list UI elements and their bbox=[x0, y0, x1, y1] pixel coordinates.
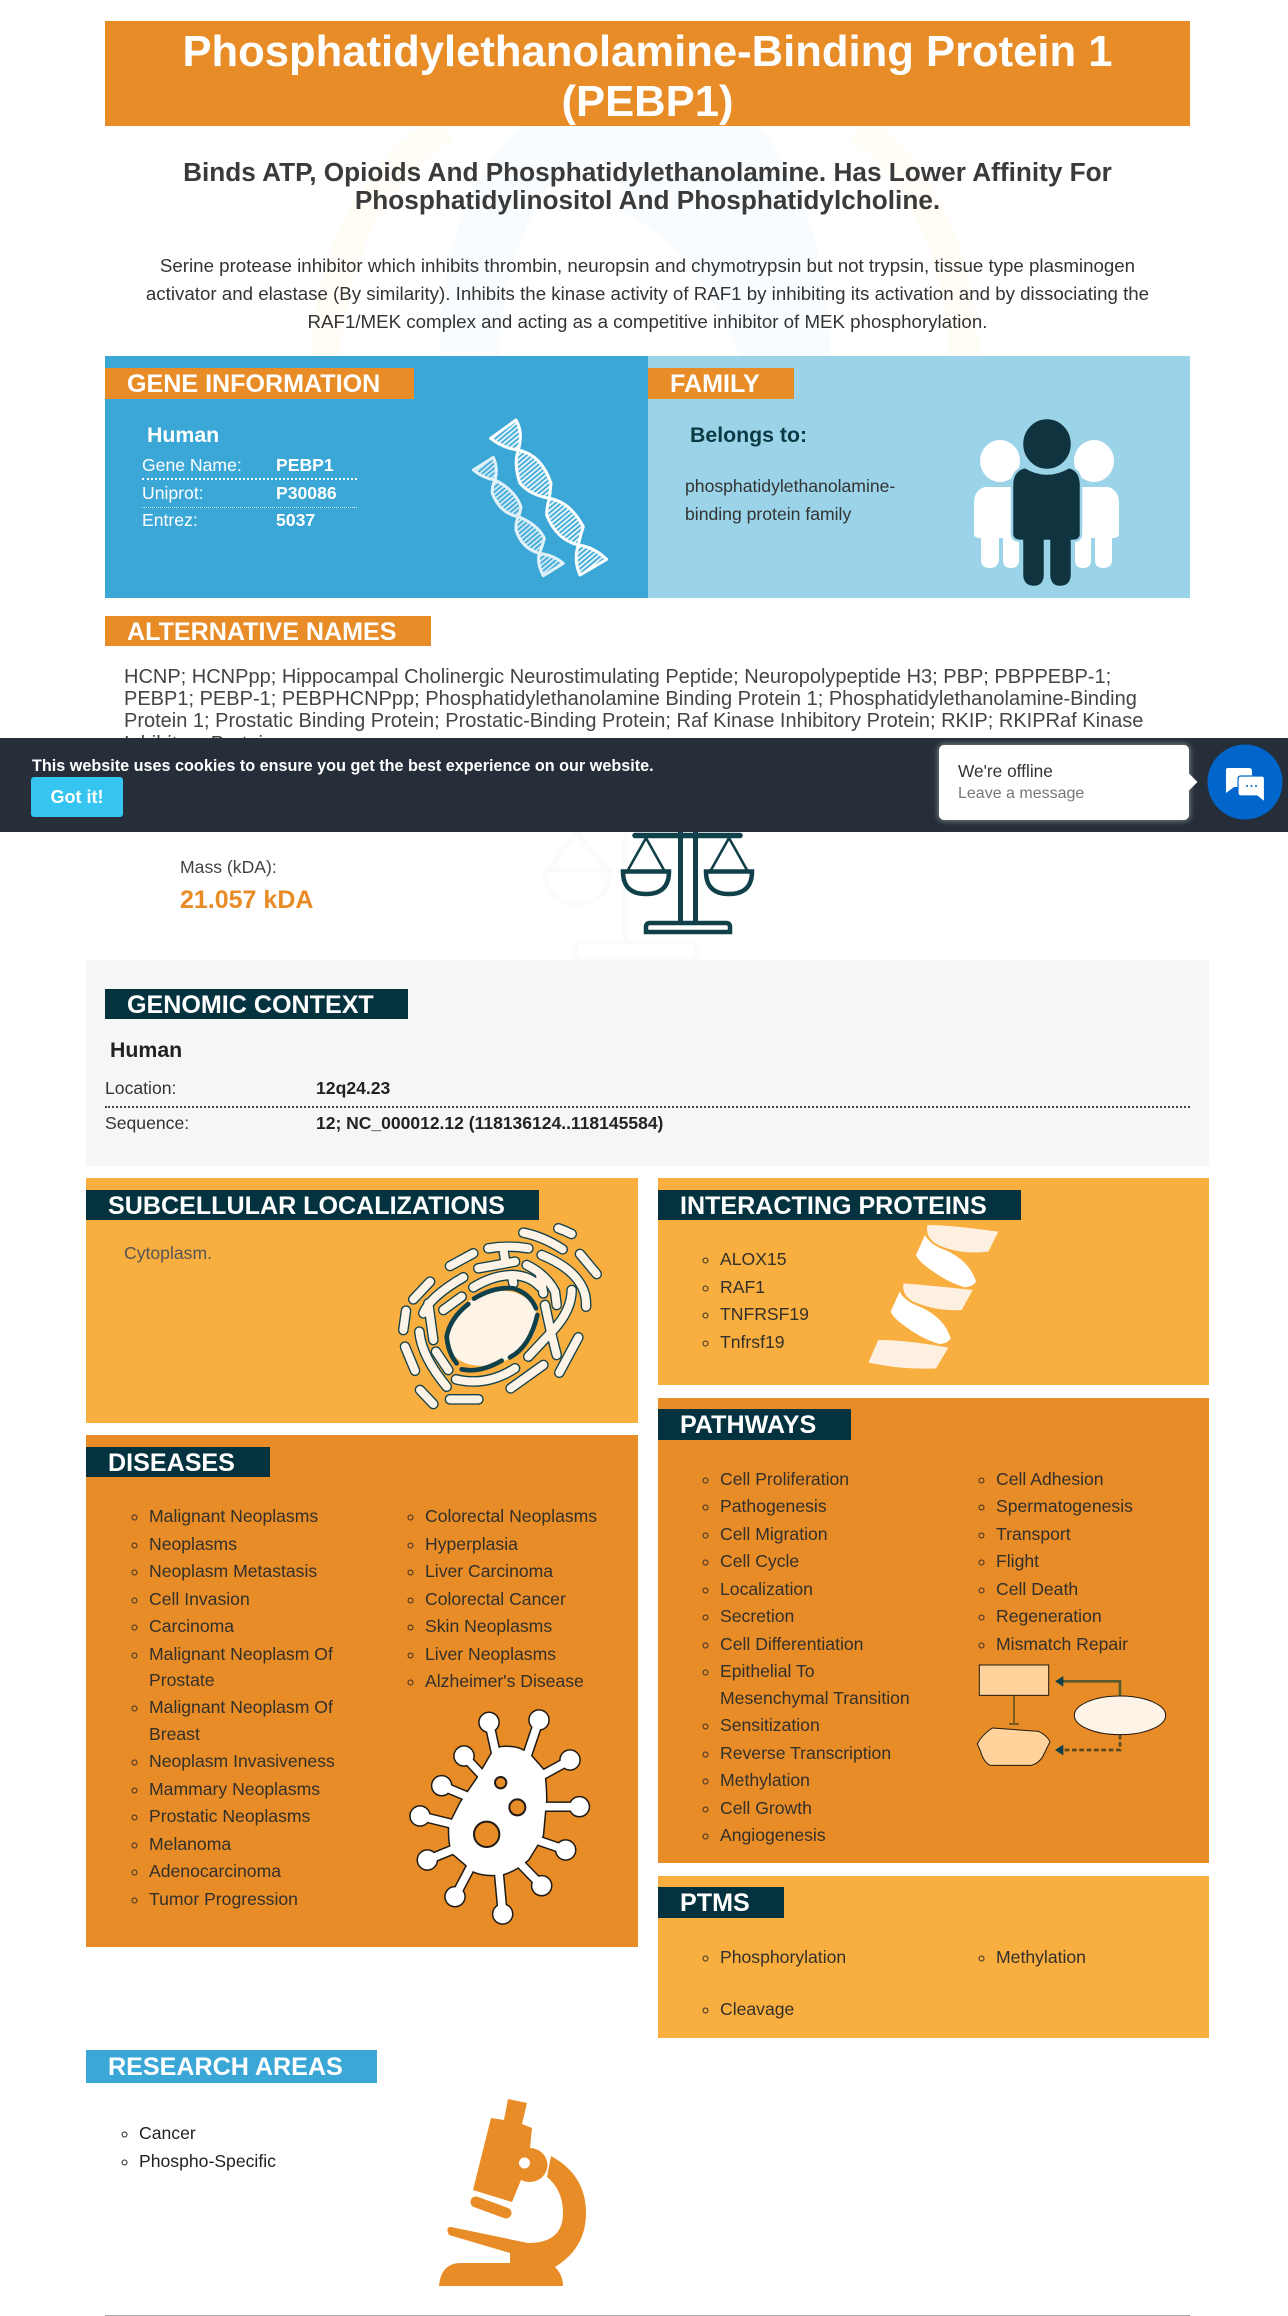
belongs to label: Belongs to: bbox=[690, 423, 807, 447]
pathway list column 2: Cell Death bbox=[996, 1579, 1078, 1599]
alternative names text: Inhibitory Protein bbox=[124, 733, 274, 755]
disease list column 2: Skin Neoplasms bbox=[425, 1616, 552, 1636]
panel: family bbox=[648, 356, 1190, 598]
research area list: Cancer bbox=[139, 2123, 196, 2143]
pathway list column 1: Cell Migration bbox=[720, 1524, 828, 1544]
icon: pathway schematic bbox=[976, 1664, 1166, 1766]
protein list: RAF1 bbox=[720, 1276, 765, 1296]
research area list bbox=[122, 2123, 276, 2170]
protein list: Tnfrsf19 bbox=[720, 1332, 785, 1352]
heading: diseases bbox=[86, 1447, 270, 1477]
panel: interacting proteins bbox=[658, 1178, 1209, 1385]
mass watermark bbox=[530, 832, 710, 964]
mass label: Mass (kDA): bbox=[180, 857, 277, 877]
disease list column 2: Colorectal Cancer bbox=[425, 1588, 566, 1608]
disease list column 1: Malignant Neoplasm Of Breast bbox=[149, 1697, 333, 1744]
heading: pathways bbox=[658, 1409, 851, 1440]
pathway list column 1: Secretion bbox=[720, 1606, 794, 1626]
disease list column 1: Mammary Neoplasms bbox=[149, 1779, 320, 1799]
description paragraph: RAF1/MEK complex and acting as a competitive inhibitor of MEK phosphorylation. bbox=[308, 310, 987, 332]
entrez row: Entrez: bbox=[142, 510, 198, 530]
heading: subcellular localizations: SUBCELLULAR LOCALIZATIONS bbox=[108, 1192, 505, 1220]
disease list column 2: Colorectal Neoplasms bbox=[425, 1506, 597, 1526]
panel: gene information bbox=[105, 356, 648, 598]
heading: pathways: PATHWAYS bbox=[680, 1411, 816, 1439]
uniprot row: Uniprot: bbox=[142, 483, 204, 503]
disease list column 1: Neoplasm Metastasis bbox=[149, 1561, 317, 1581]
pathway list column 1: Methylation bbox=[720, 1770, 810, 1790]
gene name row bbox=[142, 453, 357, 480]
disease list column 1: Adenocarcinoma bbox=[149, 1861, 281, 1881]
disease list column 1: Carcinoma bbox=[149, 1616, 234, 1636]
pathway list column 1: Sensitization bbox=[720, 1715, 820, 1735]
description paragraph bbox=[146, 254, 1149, 332]
title banner bbox=[105, 21, 1190, 126]
panel: subcellular localizations bbox=[86, 1178, 638, 1423]
pathway list column 1: Localization bbox=[720, 1579, 813, 1599]
disease list column 1: Malignant Neoplasm Of Prostate bbox=[149, 1644, 333, 1690]
heading: ptms bbox=[658, 1887, 784, 1918]
protein list: ALOX15 bbox=[720, 1249, 787, 1269]
description paragraph: Serine protease inhibitor which inhibits thrombin, neuropsin and chymotrypsin but not trypsin, tissue type plasminogen bbox=[160, 254, 1135, 276]
heading: gene information: GENE INFORMATION bbox=[127, 370, 380, 398]
pathway list column 2: Flight bbox=[996, 1551, 1039, 1571]
location row bbox=[105, 1076, 1190, 1108]
subtitle: Binds ATP, Opioids And Phosphatidylethanolamine. Has Lower Affinity For bbox=[183, 157, 1112, 187]
pathway list column 2: Spermatogenesis bbox=[996, 1496, 1133, 1516]
heading: family bbox=[648, 368, 794, 399]
sequence row: Sequence: bbox=[105, 1113, 189, 1133]
pathway list column 2: Transport bbox=[996, 1524, 1071, 1544]
chat prompt: Leave a message bbox=[958, 785, 1084, 802]
pathway list column 2 bbox=[978, 1469, 1133, 1654]
pathway list column 1: Reverse Transcription bbox=[720, 1742, 891, 1762]
protein list: TNFRSF19 bbox=[720, 1304, 809, 1324]
chat callout bbox=[939, 745, 1189, 820]
pathway list column 2: Mismatch Repair bbox=[996, 1634, 1128, 1654]
location row: 12q24.23 bbox=[316, 1078, 390, 1098]
disease list column 1: Neoplasms bbox=[149, 1534, 237, 1554]
panel: pathways bbox=[658, 1398, 1209, 1863]
subtitle bbox=[183, 157, 1112, 215]
panel: genomic context bbox=[86, 960, 1209, 1166]
alternative names text: HCNP; HCNPpp; Hippocampal Cholinergic Neurostimulating Peptide; Neuropolypeptide H3; PBP; PBPPEBP-1; bbox=[124, 666, 1111, 688]
sequence row: 12; NC_000012.12 (118136124..118145584) bbox=[316, 1113, 663, 1133]
gene name row: Gene Name: bbox=[142, 455, 242, 475]
chat status: We're offline bbox=[958, 761, 1053, 781]
cookie message: This website uses cookies to ensure you get the best experience on our website. bbox=[32, 757, 654, 775]
title banner: Phosphatidylethanolamine-Binding Protein 1 bbox=[182, 28, 1113, 76]
panel: diseases bbox=[86, 1435, 638, 1947]
heading: interacting proteins: INTERACTING PROTEINS bbox=[680, 1192, 987, 1220]
research area list: Phospho-Specific bbox=[139, 2150, 276, 2170]
pathway list column 1 bbox=[702, 1469, 910, 1845]
family description bbox=[685, 476, 895, 524]
heading: diseases: DISEASES bbox=[108, 1449, 235, 1477]
heading: genomic context: GENOMIC CONTEXT bbox=[127, 991, 374, 1019]
disease list column 2: Liver Carcinoma bbox=[425, 1561, 553, 1581]
pathway list column 1: Cell Cycle bbox=[720, 1551, 799, 1571]
pathway list column 1: Epithelial To Mesenchymal Transition bbox=[720, 1661, 910, 1708]
disease list column 1: Neoplasm Invasiveness bbox=[149, 1751, 335, 1771]
disease list column 2: Hyperplasia bbox=[425, 1534, 518, 1554]
pathway list column 2: Regeneration bbox=[996, 1606, 1102, 1626]
heading: ptms: PTMS bbox=[680, 1889, 750, 1917]
ptm cleavage item: Cleavage bbox=[720, 1999, 794, 2019]
disease list column 2: Alzheimer's Disease bbox=[425, 1671, 584, 1691]
disease list column 1: Tumor Progression bbox=[149, 1889, 298, 1909]
icon: scales bbox=[620, 832, 754, 934]
disease list column 2 bbox=[408, 1506, 597, 1691]
subtitle: Phosphatidylinositol And Phosphatidylcholine. bbox=[355, 185, 940, 215]
ptm phosphorylation item: Phosphorylation bbox=[720, 1947, 846, 1967]
species label: Human bbox=[147, 423, 219, 447]
alternative names text: Protein 1; Prostatic Binding Protein; Prostatic-Binding Protein; Raf Kinase Inhibitory Protein; RKIP; RKIPRaf Kinase bbox=[124, 710, 1143, 732]
pathway list column 1: Cell Growth bbox=[720, 1798, 812, 1818]
icon: protein helix bbox=[868, 1225, 998, 1369]
location row: Location: bbox=[105, 1078, 176, 1098]
localization text: Cytoplasm. bbox=[124, 1243, 212, 1263]
disease list column 2: Liver Neoplasms bbox=[425, 1644, 556, 1664]
disease list column 1: Malignant Neoplasms bbox=[149, 1506, 318, 1526]
title banner: (PEBP1) bbox=[562, 78, 734, 126]
pathway list column 2: Cell Adhesion bbox=[996, 1469, 1104, 1489]
pathway list column 1: Cell Differentiation bbox=[720, 1634, 863, 1654]
family description: phosphatidylethanolamine- bbox=[685, 476, 895, 496]
description paragraph: activator and elastase (By similarity). Inhibits the kinase activity of RAF1 by inhibiting its activation and by dissociating the bbox=[146, 282, 1149, 304]
disease list column 1: Melanoma bbox=[149, 1834, 231, 1854]
gene name row: PEBP1 bbox=[276, 455, 334, 475]
family description: binding protein family bbox=[685, 504, 851, 524]
footer rule bbox=[105, 2315, 1190, 2316]
pathway list column 1: Pathogenesis bbox=[720, 1496, 827, 1516]
uniprot row bbox=[142, 481, 357, 508]
protein list bbox=[702, 1249, 809, 1352]
icon: chat button bbox=[1208, 744, 1282, 820]
icon: people bbox=[974, 419, 1119, 586]
panel: ptms bbox=[658, 1876, 1209, 2038]
cookie button: Got it! bbox=[50, 787, 103, 807]
heading: research areas bbox=[86, 2050, 377, 2083]
mass value: 21.057 kDA bbox=[180, 886, 313, 914]
icon: virus bbox=[409, 1709, 590, 1925]
alternative names text bbox=[124, 666, 1143, 755]
icon: dna bbox=[472, 418, 608, 578]
ptm methylation item: Methylation bbox=[996, 1947, 1086, 1967]
cookie banner bbox=[0, 738, 1288, 832]
heading: alternative names: ALTERNATIVE NAMES bbox=[127, 618, 397, 646]
heading: family: FAMILY bbox=[670, 370, 760, 398]
pathway list column 1: Angiogenesis bbox=[720, 1825, 826, 1845]
sequence row bbox=[105, 1113, 663, 1133]
uniprot row: P30086 bbox=[276, 483, 337, 503]
disease list column 1: Prostatic Neoplasms bbox=[149, 1806, 310, 1826]
heading: research areas: RESEARCH AREAS bbox=[108, 2053, 343, 2081]
cookie button bbox=[31, 777, 123, 817]
background watermark bbox=[310, 126, 980, 356]
alternative names text: PEBP1; PEBP-1; PEBPHCNPpp; Phosphatidylethanolamine Binding Protein 1; Phosphatidylethanolamine-Binding bbox=[124, 688, 1137, 710]
icon: microscope bbox=[439, 2099, 586, 2286]
chat pointer bbox=[1181, 774, 1197, 790]
pathway list column 1: Cell Proliferation bbox=[720, 1469, 849, 1489]
disease list column 1 bbox=[132, 1506, 335, 1909]
species label: Human bbox=[110, 1038, 182, 1062]
entrez row bbox=[142, 510, 315, 530]
entrez row: 5037 bbox=[276, 510, 315, 530]
icon: cell organelle bbox=[398, 1223, 602, 1410]
disease list column 1: Cell Invasion bbox=[149, 1588, 250, 1608]
